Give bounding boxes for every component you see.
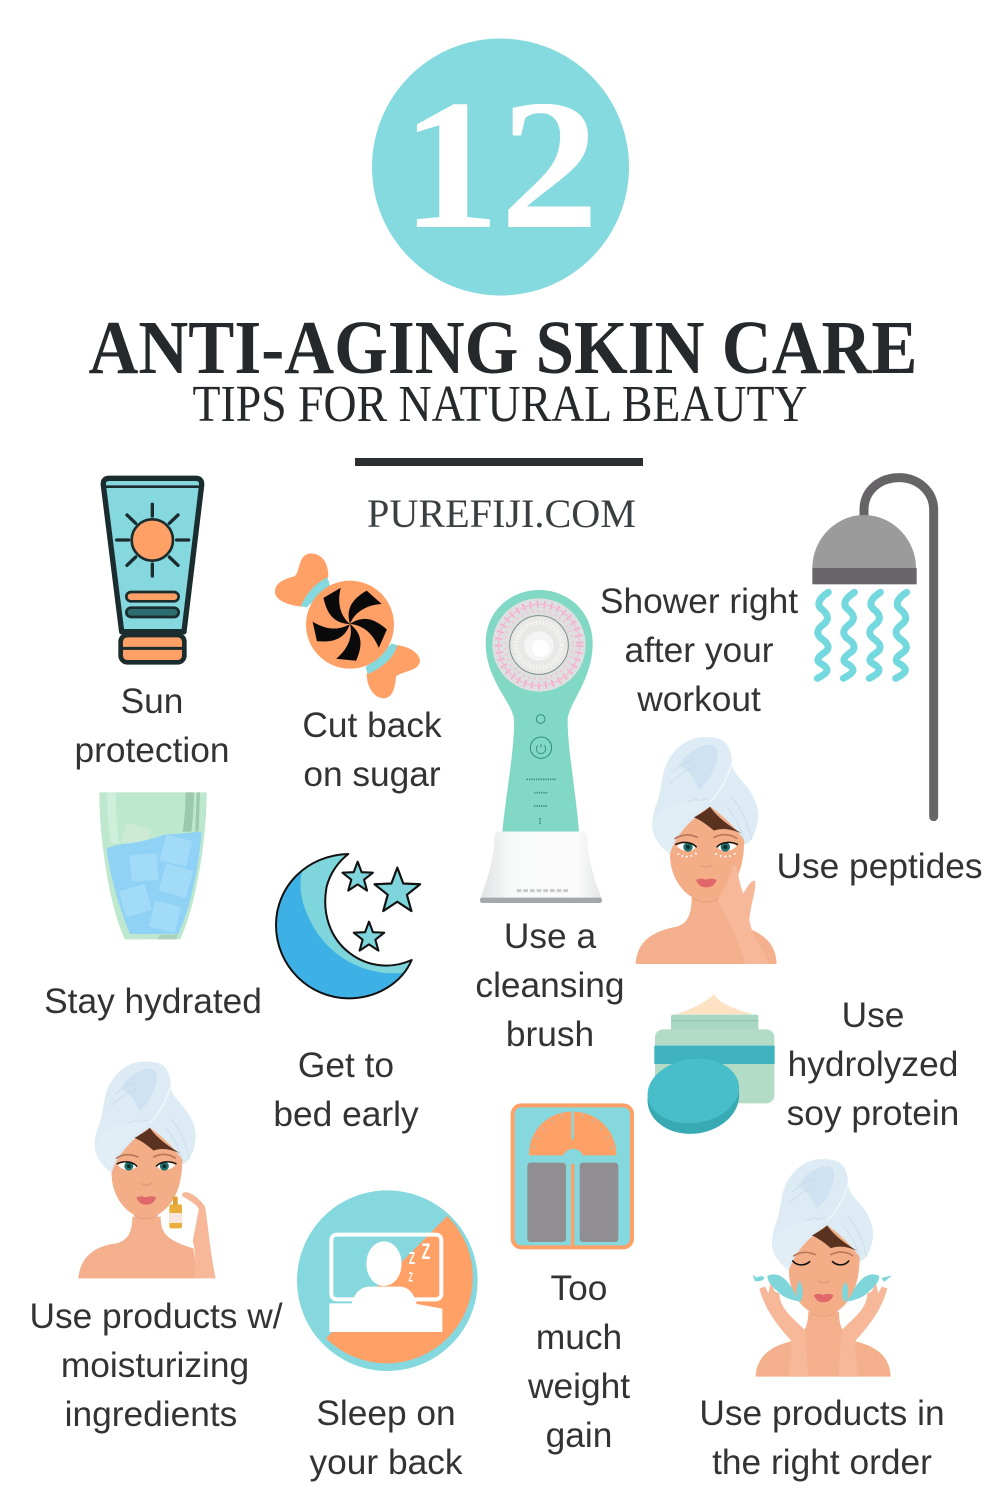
website name: PUREFIJI.COM: [367, 491, 636, 536]
label: use products with moisturizing ingredients: ingredients: [65, 1395, 237, 1434]
label: use products in the right order: Use products in: [699, 1394, 945, 1433]
label: stay hydrated: Stay hydrated: [44, 982, 262, 1021]
icon: sleeping on back: Z: [422, 1239, 430, 1264]
heading: subtitle: TIPS FOR NATURAL BEAUTY: [192, 376, 808, 433]
icon: sleeping on back: Z: [409, 1248, 415, 1268]
icon: sleeping on back: Z: [408, 1271, 413, 1285]
icon: cleansing brush: [480, 590, 602, 903]
title number circle: 12: [401, 62, 599, 268]
label: too much weight gain: Too: [551, 1269, 607, 1308]
label: sun protection: protection: [74, 731, 230, 770]
icon: candy: [275, 553, 420, 698]
icon: glass of ice water: [99, 792, 207, 939]
label: sleep on your back: Sleep on: [316, 1394, 456, 1433]
label: use products in the right order: the right order: [712, 1443, 932, 1482]
label: shower right after your workout: workout: [636, 680, 761, 719]
label: use hydrolyzed soy protein: soy protein: [787, 1094, 959, 1133]
label: use hydrolyzed soy protein: Use: [842, 996, 904, 1035]
illustration: woman holding serum: [78, 1061, 216, 1278]
label: cut back on sugar: on sugar: [303, 755, 441, 794]
illustration: woman splashing water: [753, 1159, 892, 1377]
icon: weighing scale: [513, 1105, 632, 1247]
heading: main title: ANTI-AGING SKIN CARE: [88, 306, 918, 390]
label: use a cleansing brush: Use a: [504, 917, 596, 956]
label: too much weight gain: weight: [527, 1367, 630, 1406]
label: use a cleansing brush: brush: [506, 1015, 594, 1054]
label: shower right after your workout: Shower right: [600, 582, 798, 621]
label: cut back on sugar: Cut back: [302, 706, 442, 745]
label: use a cleansing brush: cleansing: [475, 966, 625, 1005]
icon: sunscreen tube: [103, 478, 202, 662]
icon: sleeping on back: [297, 1190, 478, 1371]
label: shower right after your workout: after your: [624, 631, 774, 670]
illustration: woman applying peptides: [636, 737, 777, 964]
label: sun protection: Sun: [121, 682, 183, 721]
label: use products with moisturizing ingredients: Use products w/: [29, 1297, 283, 1336]
title number circle: [372, 38, 629, 296]
icon: moon and stars: [276, 854, 420, 998]
label: get to bed early: Get to: [298, 1046, 394, 1085]
label: use peptides: Use peptides: [776, 847, 983, 886]
label: use products with moisturizing ingredients: moisturizing: [61, 1346, 249, 1385]
label: get to bed early: bed early: [273, 1095, 419, 1134]
label: too much weight gain: much: [536, 1318, 622, 1357]
label: too much weight gain: gain: [546, 1416, 612, 1455]
label: sleep on your back: your back: [309, 1443, 463, 1482]
icon: shower: [812, 478, 934, 817]
icon: cream jar: [643, 994, 775, 1140]
label: use hydrolyzed soy protein: hydrolyzed: [788, 1045, 958, 1084]
